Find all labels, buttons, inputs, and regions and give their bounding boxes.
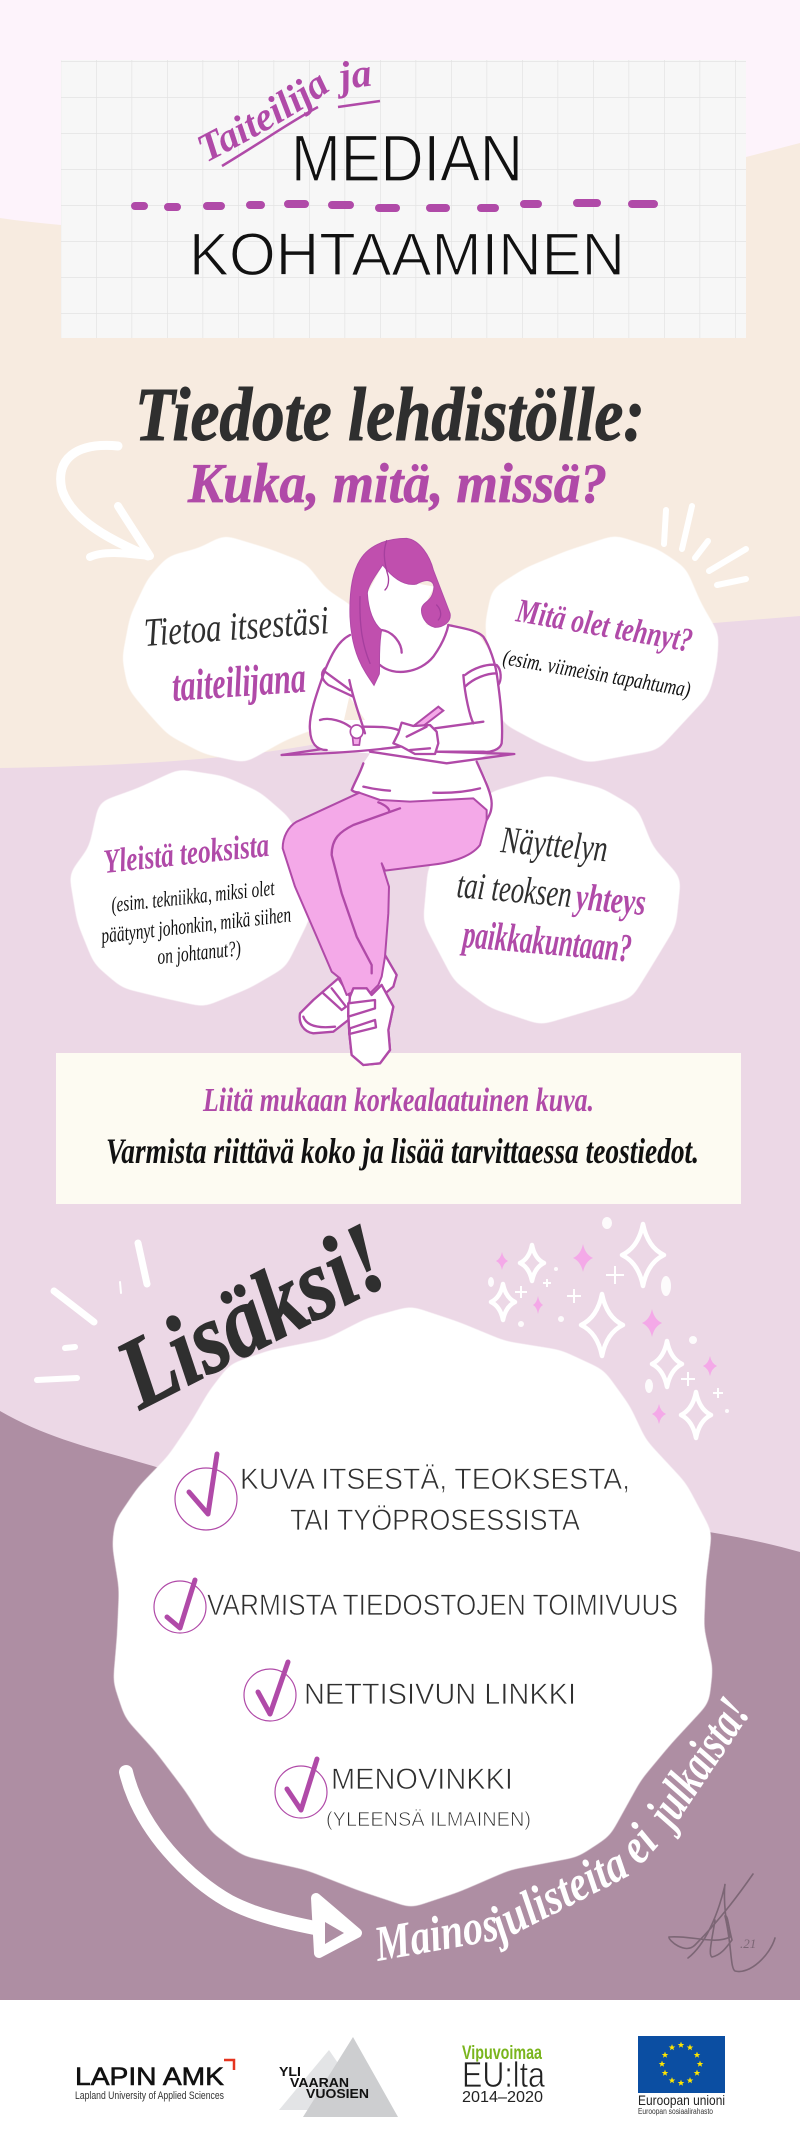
background: cream wave	[0, 143, 800, 800]
logo: Lapin AMK: Lapland University of Applied Sciences	[75, 2090, 224, 2102]
bubble: yleistä teoksista	[69, 769, 311, 1007]
text: taiteilijana: taiteilijana	[170, 653, 307, 711]
check item: menovinkki	[275, 1759, 531, 1831]
logo: Vipuvoimaa EU:lta	[462, 2043, 546, 2106]
illustration: seated woman writing	[282, 538, 514, 1065]
logo: Vipuvoimaa EU:lta: 2014–2020	[462, 2089, 543, 2106]
logo: Lapin AMK	[75, 2060, 234, 2102]
text: esim. viimeisin tapahtuma: (esim. viimeisin tapahtuma)	[501, 644, 693, 702]
logo: Lapin AMK: LAPIN AMK	[75, 2063, 224, 2091]
bubble: mitä olet tehnyt	[485, 535, 719, 763]
subheading: Kuka, mitä, missä: Kuka, mitä, missä?	[187, 453, 607, 515]
icon: sparkles	[488, 1217, 729, 1438]
panel: checklist bubble	[112, 1306, 713, 1908]
icon: check mark	[244, 1662, 296, 1721]
text: nettisivun linkki: NETTISIVUN LINKKI	[304, 1678, 576, 1711]
title: dashed divider	[135, 203, 654, 208]
shoes	[300, 955, 397, 1065]
icon: white dashes around Lisäksi	[37, 1243, 147, 1380]
logo: Euroopan unioni flag: Euroopan sosiaalirahasto	[638, 2107, 713, 2116]
text: tai teoksen yhteys: tai teoksen	[455, 864, 573, 916]
heading: Lisäksi: Lisäksi!	[99, 1201, 404, 1430]
logo: Euroopan unioni flag	[638, 2036, 725, 2116]
check item: nettisivun linkki	[244, 1662, 576, 1721]
text: Liitä mukaan korkealaatuinen kuva: Liitä mukaan korkealaatuinen kuva.	[202, 1082, 594, 1119]
arrow: big white arrow	[126, 1772, 357, 1953]
bubble: näyttelyn yhteys	[423, 775, 681, 1025]
face and neck	[367, 565, 448, 672]
logo: Vipuvoimaa EU:lta: EU:lta	[462, 2054, 546, 2095]
signature: .21	[740, 1936, 756, 1951]
check item: varmista tiedostojen toimivuus	[154, 1580, 678, 1633]
title panel: graph paper	[61, 60, 746, 338]
check item: menovinkki: (YLEENSÄ ILMAINEN)	[326, 1809, 531, 1831]
icon: rays near second bubble	[664, 506, 746, 585]
logo: Yli vaaran vuosien: VUOSIEN	[306, 2086, 369, 2101]
text: kuva itsestä: KUVA ITSESTÄ, TEOKSESTA,	[240, 1463, 630, 1496]
text: teokset details: päätynyt johonkin, mikä siihen	[98, 902, 292, 948]
front shoe over trousers	[348, 985, 393, 1065]
watch	[350, 725, 363, 745]
logo: Euroopan unioni flag: Euroopan unioni	[638, 2092, 725, 2108]
text: Mainosjulisteita ei julkaista: julisteita	[475, 1835, 636, 1953]
check item: kuva itsestä	[175, 1454, 630, 1537]
text: Yleistä teoksista: Yleistä teoksista	[102, 827, 271, 881]
text: Mainosjulisteita ei julkaista: Mainos	[369, 1895, 502, 1972]
heading: Tiedote lehdistölle: Tiedote lehdistölle:	[135, 373, 645, 457]
text: menovinkki: MENOVINKKI	[331, 1763, 513, 1796]
trousers	[283, 793, 487, 995]
icon: check mark	[154, 1580, 206, 1633]
logo: Yli vaaran vuosien: VAARAN	[290, 2075, 349, 2090]
arrow: white curved arrow to first bubble	[61, 445, 150, 557]
text: teokset details: (esim. tekniikka, miksi olet	[110, 875, 276, 917]
background: lilac wave	[0, 616, 800, 1600]
text: Mainosjulisteita ei julkaista: ei	[607, 1814, 668, 1873]
text: teokset details	[98, 875, 292, 969]
logo: Vipuvoimaa EU:lta: Vipuvoimaa	[462, 2043, 542, 2064]
icon: check mark	[175, 1454, 237, 1530]
logo: Yli vaaran vuosien	[279, 2037, 398, 2117]
title: MEDIAN: MEDIAN	[291, 121, 523, 195]
callout: image quality note	[56, 1053, 741, 1204]
check item: kuva itsestä: TAI TYÖPROSESSISTA	[290, 1504, 580, 1537]
torso	[310, 625, 502, 820]
paper sheet	[282, 735, 514, 763]
icon: check mark	[275, 1759, 327, 1818]
hair	[350, 538, 450, 685]
footer band	[0, 2000, 800, 2154]
signature	[669, 1874, 775, 1972]
text: tai teoksen yhteys: yhteys	[571, 876, 648, 924]
text: Näyttelyn: Näyttelyn	[498, 819, 609, 870]
text: Mainosjulisteita ei julkaista: julkaista!	[632, 1687, 761, 1840]
text: Tietoa itsestäsi: Tietoa itsestäsi	[142, 597, 330, 655]
text: Mitä olet tehnyt: Mitä olet tehnyt?	[513, 592, 695, 660]
text: Mainosjulisteita ei julkaista	[369, 1687, 761, 1972]
title: Taiteilija ja: Taiteilija ja	[198, 61, 371, 162]
hand and pen	[393, 707, 443, 754]
title: KOHTAAMINEN: KOHTAAMINEN	[189, 221, 625, 288]
bubble: tietoa itsestäsi	[122, 535, 357, 763]
text: teokset details: on johtanut?)	[156, 935, 242, 969]
text: varmista: VARMISTA TIEDOSTOJEN TOIMIVUUS	[207, 1589, 678, 1622]
background: mauve wave	[0, 1411, 800, 2000]
text: paikkakuntaan: paikkakuntaan?	[459, 911, 633, 971]
logo: Yli vaaran vuosien: YLI	[279, 2064, 301, 2079]
